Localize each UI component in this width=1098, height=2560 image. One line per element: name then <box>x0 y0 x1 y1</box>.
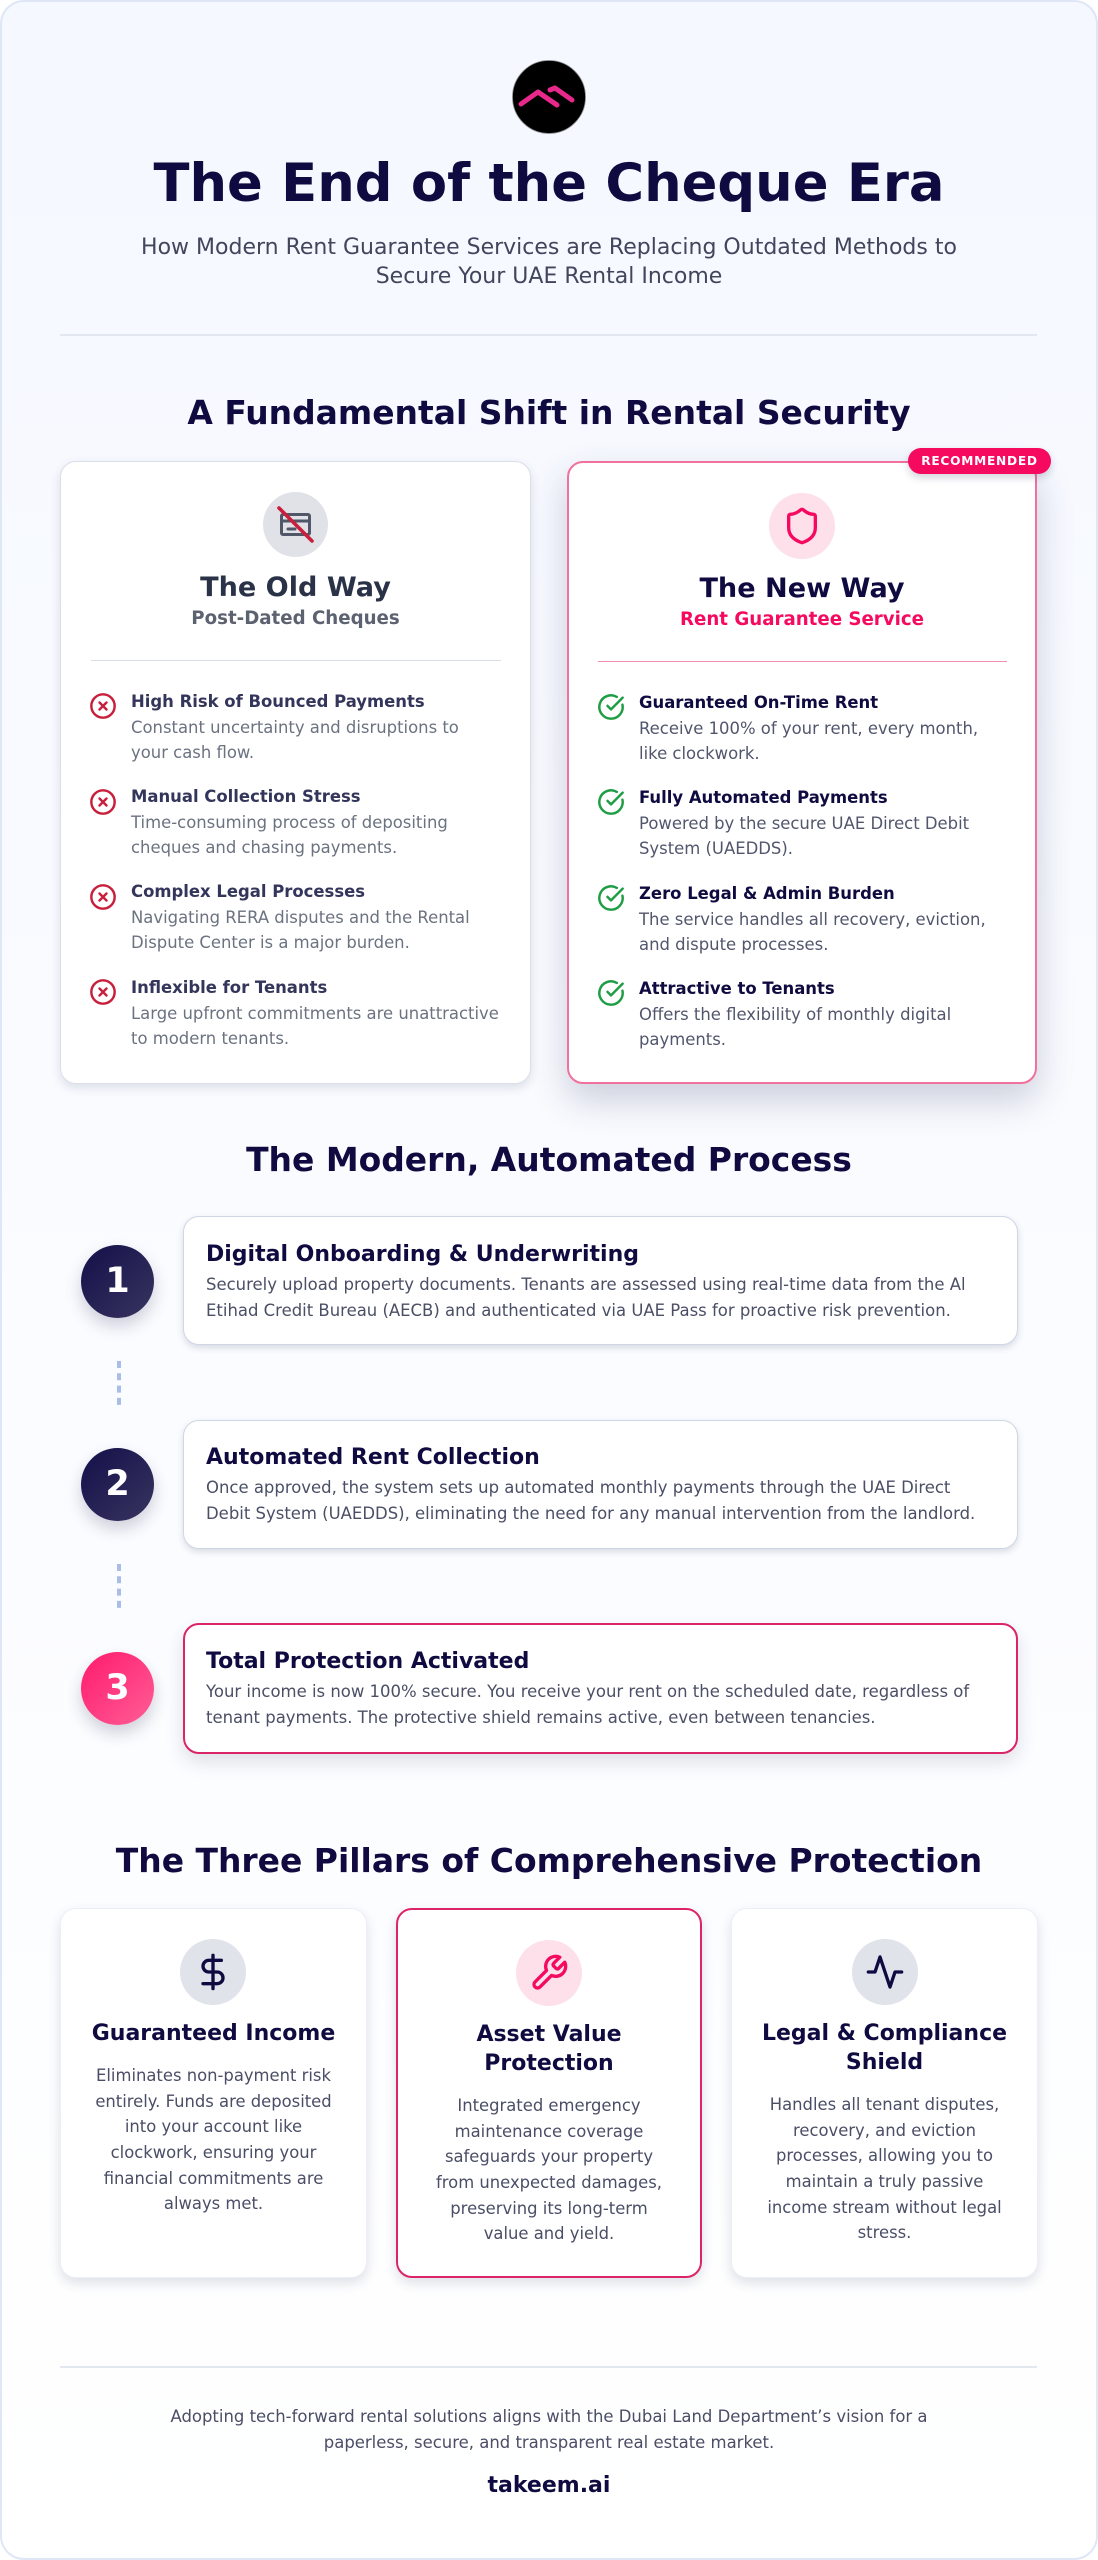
step 2 description <box>206 1478 975 1523</box>
panel: asset value protection <box>396 1908 702 2278</box>
panel: the old way <box>57 461 534 1091</box>
step 2 description: Debit System (UAEDDS), eliminating the need for any manual intervention from the landlord. <box>206 1504 975 1523</box>
pillar text: guaranteed income <box>95 2066 332 2213</box>
pillar text: asset value: from unexpected damages, <box>436 2173 662 2192</box>
icon: dollar <box>180 1939 246 2005</box>
old item: inflexible: Inflexible for Tenants <box>131 978 327 997</box>
icon: x circle <box>90 979 116 1005</box>
step 3 description: tenant payments. The protective shield remains active, even between tenancies. <box>206 1708 876 1727</box>
old item: manual collection: Manual Collection Stress <box>131 787 361 806</box>
pillar heading: legal: Shield <box>846 2050 923 2074</box>
icon: activity pulse <box>852 1939 918 2005</box>
subtitle: How Modern Rent Guarantee Services are Replacing Outdated Methods to <box>141 235 957 260</box>
panel: legal and compliance shield <box>731 1908 1038 2278</box>
new item: on-time rent <box>639 693 978 763</box>
step 1 description <box>206 1275 966 1320</box>
new item: attractive to tenants: Attractive to Tenants <box>639 979 835 998</box>
old item: manual collection <box>130 787 448 857</box>
icon: crossed-out cheque <box>263 492 328 557</box>
pillar text: asset value: value and yield. <box>484 2224 614 2243</box>
step 3 number <box>81 1652 154 1725</box>
heading: automated process: The Modern, Automated Process <box>246 1140 852 1179</box>
step 2 number: 2 <box>105 1464 130 1504</box>
icon: takeem logo <box>512 60 586 134</box>
icon: x circle <box>90 693 116 719</box>
footer text: Adopting tech-forward rental solutions aligns with the Dubai Land Department’s vision for a <box>170 2407 928 2426</box>
old item: inflexible: to modern tenants. <box>131 1029 289 1048</box>
pillar text: legal <box>767 2095 1002 2242</box>
old item: legal processes <box>131 882 470 952</box>
footer text: paperless, secure, and transparent real estate market. <box>324 2433 774 2452</box>
new item: attractive to tenants: payments. <box>639 1030 726 1049</box>
heading: fundamental shift: A Fundamental Shift in Rental Security <box>187 393 911 432</box>
subtitle: Secure Your UAE Rental Income <box>376 264 722 289</box>
step 1 card <box>183 1216 1018 1345</box>
icon: check circle <box>598 885 624 911</box>
step 2 heading: Automated Rent Collection <box>206 1444 540 1470</box>
pillar text: legal: processes, allowing you to <box>776 2146 993 2165</box>
new item: zero burden: Zero Legal & Admin Burden <box>639 884 895 903</box>
pillar text: guaranteed income: into your account like <box>125 2117 302 2136</box>
pillar text: guaranteed income: entirely. Funds are deposited <box>95 2092 332 2111</box>
new item: automated payments: Powered by the secure UAE Direct Debit <box>639 814 969 833</box>
old item: bounced payments: High Risk of Bounced Payments <box>131 692 425 711</box>
pillar text: guaranteed income: clockwork, ensuring your <box>111 2143 316 2162</box>
step 3 number: 3 <box>105 1668 130 1708</box>
new item: zero burden: and dispute processes. <box>639 935 828 954</box>
new item: attractive to tenants <box>639 979 951 1049</box>
arrow: dashed connector 2 <box>117 1564 121 1608</box>
old way card background <box>60 461 531 1084</box>
old item: manual collection: Time-consuming process of depositing <box>131 813 448 832</box>
step 1 number: 1 <box>105 1261 130 1301</box>
badge: recommended <box>908 448 1051 474</box>
panel: the new way <box>550 448 1054 1116</box>
icon: check circle <box>598 694 624 720</box>
footer text <box>170 2407 928 2452</box>
new item: on-time rent: like clockwork. <box>639 744 760 763</box>
badge: recommended: RECOMMENDED <box>921 454 1038 468</box>
pillar text: guaranteed income: always met. <box>164 2194 263 2213</box>
old way subheading: Post-Dated Cheques <box>191 608 400 629</box>
step 2 description: Once approved, the system sets up automated monthly payments through the UAE Direct <box>206 1478 950 1497</box>
footer brand: takeem.ai <box>488 2473 610 2498</box>
old way heading: The Old Way <box>200 572 391 603</box>
new way heading: The New Way <box>699 573 905 604</box>
new item: attractive to tenants: Offers the flexibility of monthly digital <box>639 1005 951 1024</box>
step 2 number <box>81 1448 154 1521</box>
old item: bounced payments: your cash flow. <box>131 743 254 762</box>
pillar heading: legal: Legal & Compliance <box>762 2020 1007 2046</box>
new item: automated payments: System (UAEDDS). <box>639 839 793 858</box>
pillar text: legal: maintain a truly passive <box>786 2172 983 2191</box>
pillar text: asset value: safeguards your property <box>445 2147 653 2166</box>
step 1 heading: Digital Onboarding & Underwriting <box>206 1242 639 1266</box>
new item: zero burden <box>638 884 986 954</box>
pillar text: asset value: Integrated emergency <box>457 2096 641 2115</box>
icon: check circle <box>598 980 624 1006</box>
heading: three pillars: The Three Pillars of Comprehensive Protection <box>116 1841 982 1880</box>
step 1 description: Securely upload property documents. Tenants are assessed using real-time data from the Al <box>206 1275 966 1294</box>
pillar text: asset value <box>436 2096 662 2243</box>
subtitle <box>141 235 957 289</box>
new item: automated payments <box>639 788 969 858</box>
old item: manual collection: cheques and chasing payments. <box>131 838 397 857</box>
old item: inflexible: Large upfront commitments are unattractive <box>131 1004 499 1023</box>
pillar text: legal: Handles all tenant disputes, <box>770 2095 999 2114</box>
pillar heading: asset value: Asset Value <box>476 2022 622 2046</box>
icon: wrench <box>516 1940 582 2006</box>
icon: shield <box>769 493 835 559</box>
step 3 description: Your income is now 100% secure. You receive your rent on the scheduled date, regardless of <box>206 1682 969 1701</box>
old item: bounced payments <box>131 692 459 762</box>
step 2 card <box>183 1420 1018 1549</box>
arrow: dashed connector 1 <box>117 1361 121 1405</box>
new item: on-time rent: Receive 100% of your rent, every month, <box>639 719 978 738</box>
pillar text: asset value: maintenance coverage <box>455 2122 643 2141</box>
pillar heading: asset value: Protection <box>484 2050 614 2076</box>
pillar text: legal: income stream without legal <box>767 2198 1002 2217</box>
step 1 number <box>81 1245 154 1318</box>
pillar text: legal: recovery, and eviction <box>793 2121 976 2140</box>
pillar heading: guaranteed income: Guaranteed Income <box>92 2020 335 2046</box>
pillar text: guaranteed income: Eliminates non-payment risk <box>96 2066 331 2085</box>
pillar heading: asset value <box>476 2022 622 2076</box>
icon: x circle <box>90 789 116 815</box>
new way card background <box>567 461 1037 1084</box>
new item: on-time rent: Guaranteed On-Time Rent <box>639 693 878 712</box>
old item: bounced payments: Constant uncertainty and disruptions to <box>131 718 459 737</box>
title: The End of the Cheque Era <box>154 153 944 214</box>
step 3 heading: Total Protection Activated <box>206 1648 529 1674</box>
step 3 card <box>183 1623 1018 1754</box>
pillar heading: legal <box>762 2020 1007 2074</box>
step 3 description <box>206 1682 970 1727</box>
new way subheading: Rent Guarantee Service <box>680 609 924 630</box>
step 1 description: Etihad Credit Bureau (AECB) and authenticated via UAE Pass for proactive risk prevention. <box>206 1301 951 1320</box>
icon: check circle <box>598 789 624 815</box>
pillar text: guaranteed income: financial commitments are <box>104 2169 323 2188</box>
old item: legal processes: Complex Legal Processes <box>131 882 365 901</box>
panel: guaranteed income <box>60 1908 367 2278</box>
icon: x circle <box>90 884 116 910</box>
new item: automated payments: Fully Automated Payments <box>639 788 888 807</box>
old item: legal processes: Navigating RERA disputes and the Rental <box>131 908 470 927</box>
new item: zero burden: The service handles all recovery, eviction, <box>639 910 986 929</box>
pillar text: asset value: preserving its long-term <box>450 2199 648 2218</box>
old item: inflexible <box>131 978 499 1048</box>
pillar text: legal: stress. <box>858 2223 911 2242</box>
old item: legal processes: Dispute Center is a major burden. <box>131 933 410 952</box>
